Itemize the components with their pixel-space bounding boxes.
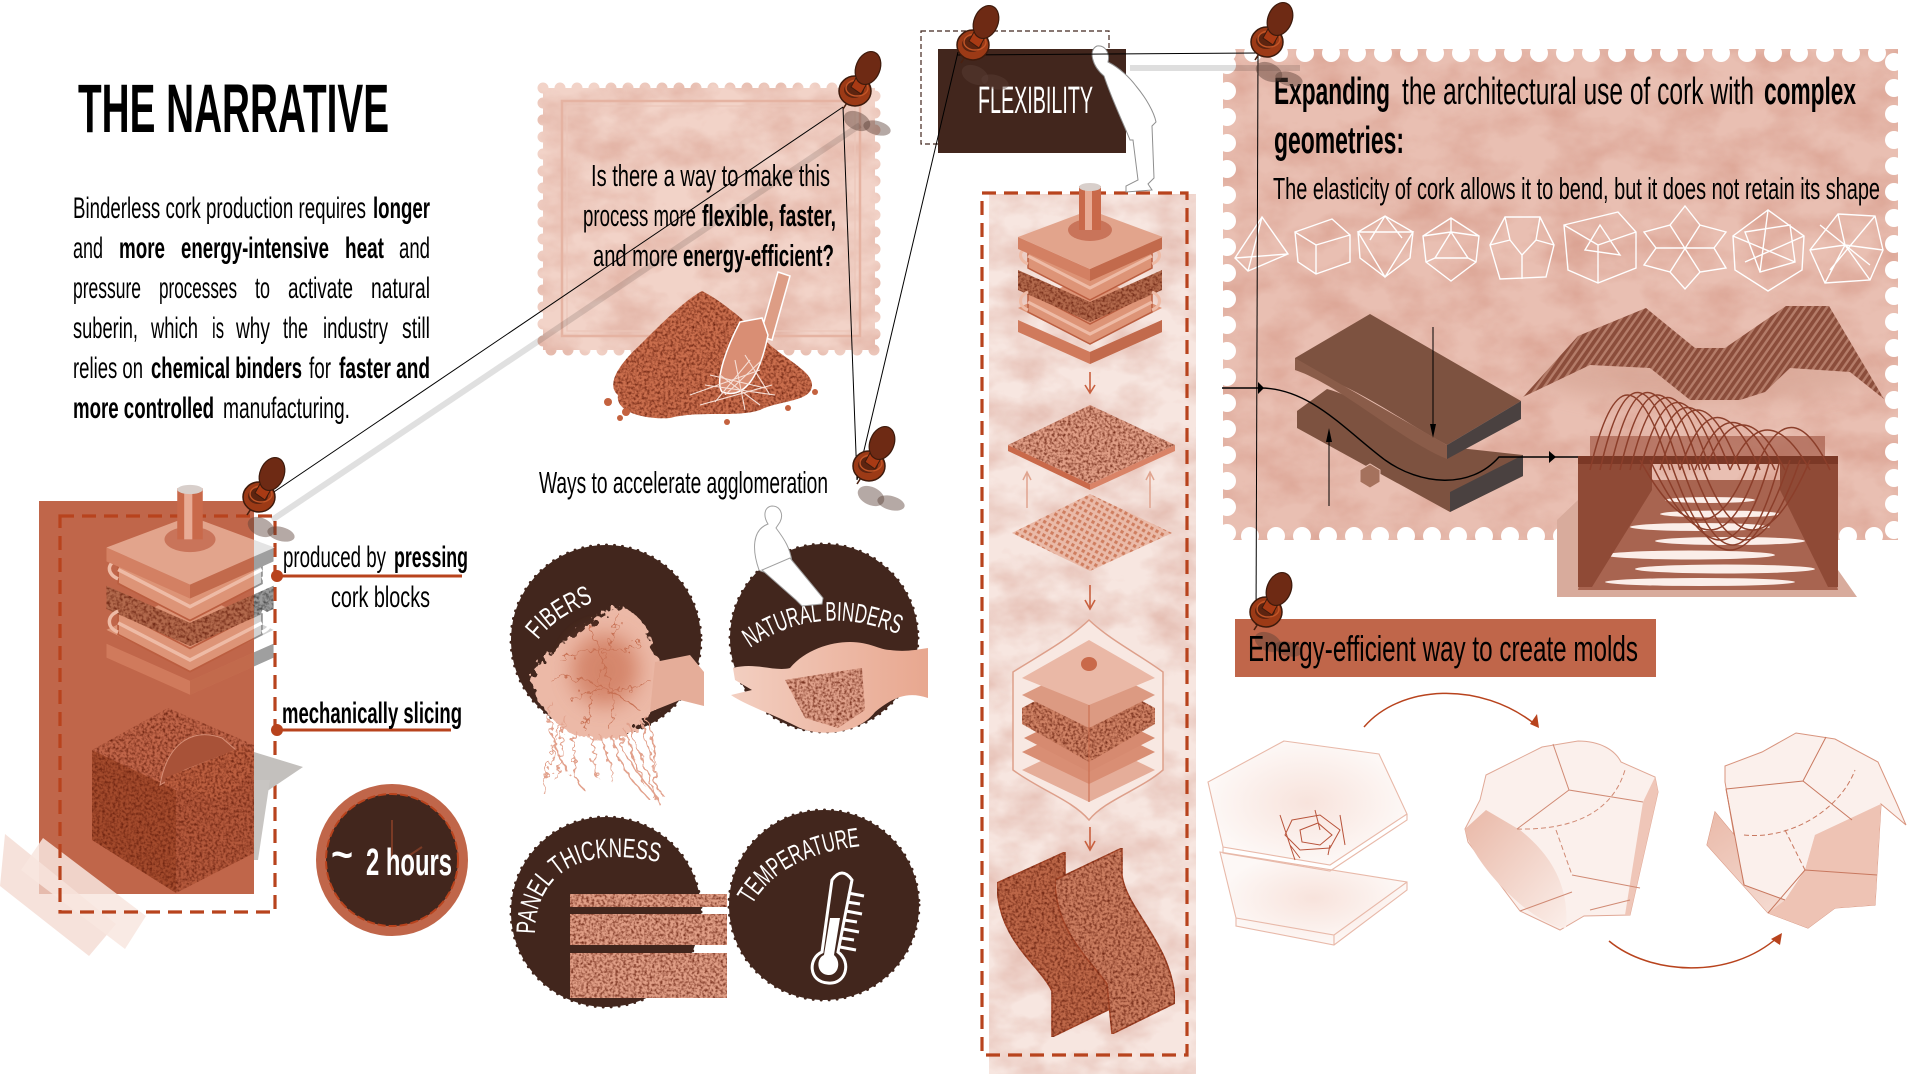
text block: narrative: is (212, 312, 224, 345)
icon: pin on geometry panel (1251, 0, 1304, 89)
text block: narrative: energy-intensive (181, 232, 329, 265)
text block: narrative: the (283, 312, 308, 345)
illustration: bending mold (1222, 314, 1584, 512)
panel: complex geometries stamp (1223, 49, 1898, 540)
text block: narrative: more (119, 232, 165, 265)
connector: strings between pins (262, 52, 1258, 625)
text block: narrative: still (402, 312, 430, 345)
panel: flexibility column (982, 183, 1196, 1074)
text block: expanding (1273, 71, 1880, 206)
text block: expanding: geometries: (1274, 120, 1404, 162)
text block: question: flexible, faster, (702, 198, 836, 233)
icon: fibers circle: FIBERS (524, 586, 591, 639)
icon: temperature circle (728, 808, 920, 1002)
text block: narrative: processes (159, 272, 237, 305)
text block: narrative: industry (323, 312, 388, 345)
text block: narrative: chemical binders (151, 352, 302, 385)
text block: narrative: Binderless cork production requires (73, 192, 366, 225)
icon: pin on flexibility (957, 2, 1010, 92)
text block: narrative: activate (288, 272, 353, 305)
illustration: cork granule pile and scoop (604, 272, 818, 425)
callout: produced by pressing cork blocks: produced by (283, 541, 386, 574)
arrow: top curve (1364, 693, 1539, 728)
text block: narrative: faster and (339, 352, 430, 385)
text block: question: process more (583, 198, 696, 233)
text block: narrative: why (235, 312, 270, 345)
title: THE NARRATIVE (78, 70, 389, 147)
arrow: bottom curve (1609, 933, 1782, 968)
callout: mechanically slicing (271, 697, 462, 736)
text block: narrative: suberin, (73, 312, 138, 345)
text block: narrative: for (309, 352, 331, 385)
text block: question: energy-efficient? (683, 238, 834, 273)
icon: natural binders circle (728, 542, 928, 734)
icon: clock two hours (316, 784, 468, 936)
panel: energy-efficient molds label (1235, 619, 1656, 677)
text block: narrative: heat (345, 232, 384, 265)
panel: process block (0, 485, 303, 956)
text block: narrative: natural (371, 272, 430, 305)
callout: produced by pressing cork blocks (271, 541, 468, 614)
text block: narrative: relies on (73, 352, 143, 385)
icon: pin on molds label (1250, 569, 1303, 659)
icons: polyhedra row (1235, 206, 1883, 291)
icon: pin on question stamp (839, 48, 892, 138)
text block: narrative: longer (373, 192, 430, 225)
icon: temperature circle: TEMPERATURE (736, 828, 860, 902)
text block: expanding: complex (1764, 71, 1856, 113)
text block: question (583, 158, 836, 273)
text: energy-efficient molds: Energy-efficient way to create molds (1248, 628, 1638, 669)
text block: question: Is there a way to make this (591, 158, 830, 193)
illustration: arched pavilion (1557, 392, 1857, 597)
label: flexibility (921, 31, 1126, 153)
icon: pin at ways to accelerate (853, 423, 906, 513)
heading: ways to accelerate agglomeration: Ways to accelerate agglomeration (539, 465, 828, 500)
icon: panel thickness circle (510, 816, 727, 1008)
callout: produced by pressing cork blocks: pressing (394, 541, 468, 574)
figure: seated person (755, 506, 823, 606)
icon: pin on process block (243, 454, 296, 544)
text block: narrative: which (150, 312, 198, 345)
illustration: unfolded mold (1707, 733, 1906, 928)
text block: narrative: manufacturing. (223, 392, 350, 425)
text block: narrative: pressure (73, 272, 141, 305)
illustration: folded mold (1465, 741, 1658, 930)
panel: question stamp (543, 88, 875, 350)
text block: narrative: and (399, 232, 430, 265)
illustration: hexagonal mold plates (1208, 741, 1407, 945)
icon: panel thickness circle: PANEL THICKNESS (516, 838, 661, 932)
text block: question: and more (593, 238, 678, 273)
text block: narrative (73, 192, 430, 425)
illustration: woven wing structure (1523, 306, 1884, 403)
figure: standing person (1092, 46, 1156, 192)
connector: string shadows (272, 68, 1300, 520)
icon: clock two hours: ~ (331, 833, 353, 877)
label: flexibility: FLEXIBILITY (978, 80, 1093, 122)
callout: produced by pressing cork blocks: cork blocks (331, 581, 430, 614)
text block: narrative: and (73, 232, 103, 265)
icon: clock two hours: 2 hours (366, 842, 452, 884)
callout: mechanically slicing: mechanically slicing (282, 697, 462, 730)
icon: fibers circle (510, 544, 704, 806)
text block: narrative: to (255, 272, 270, 305)
text block: narrative: more controlled (73, 392, 214, 425)
text block: expanding: Expanding (1274, 71, 1390, 113)
icon: natural binders circle: NATURAL BINDERS (741, 602, 903, 648)
